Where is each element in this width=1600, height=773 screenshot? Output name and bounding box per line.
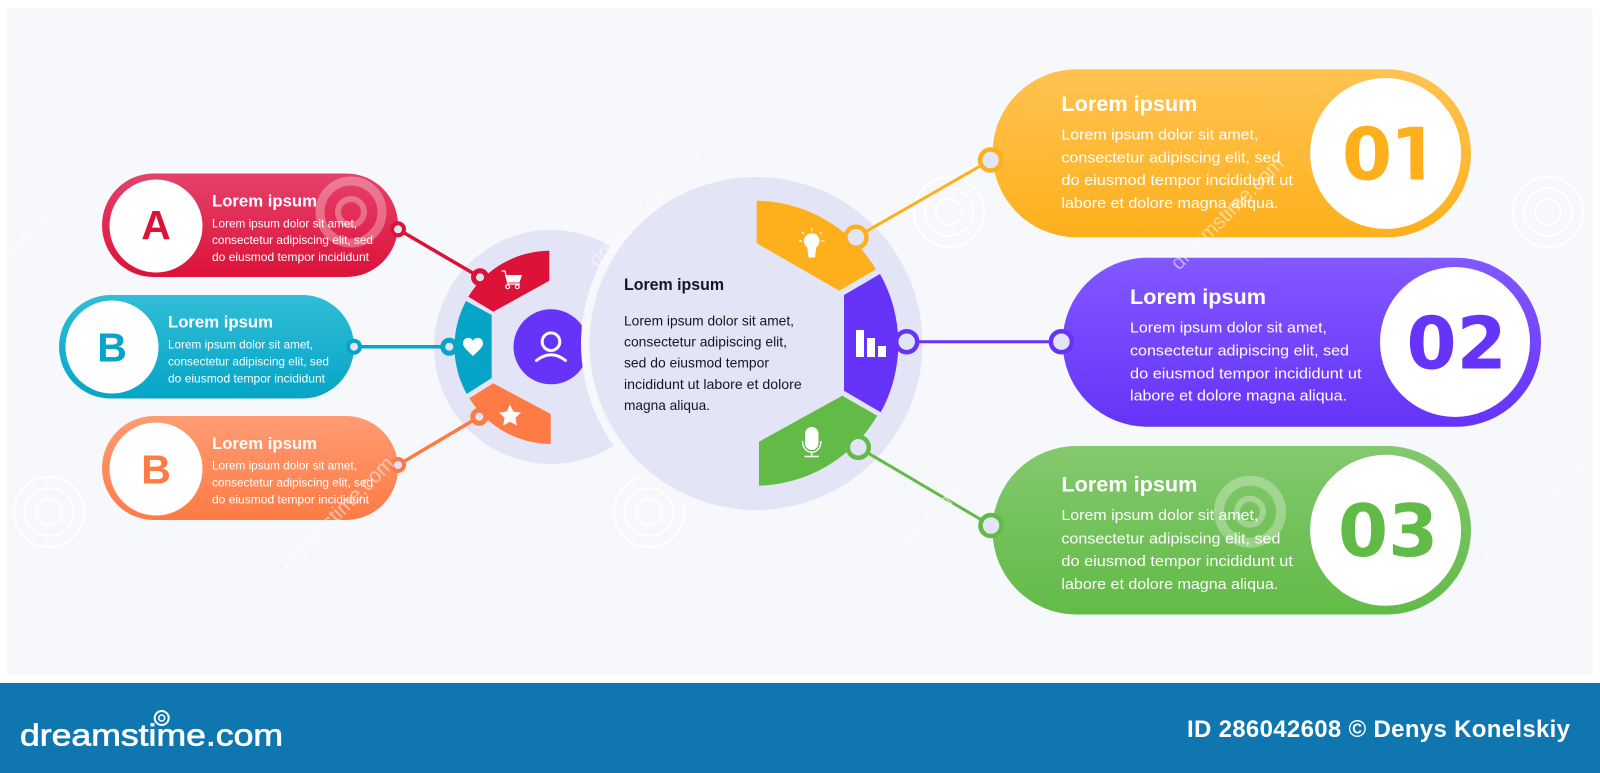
center body text: incididunt ut labore et dolore bbox=[624, 376, 802, 392]
pill A: red: do eiusmod tempor incididunt bbox=[212, 250, 370, 264]
pill 01: yellow: labore et dolore magna aliqua. bbox=[1061, 195, 1278, 212]
center body text bbox=[624, 313, 802, 413]
red segment with cart icon bbox=[468, 251, 549, 312]
pill 01: yellow: Lorem ipsum dolor sit amet, bbox=[1061, 126, 1258, 143]
center body text: sed do eiusmod tempor bbox=[624, 355, 769, 371]
yellow segment with bulb icon bbox=[757, 201, 876, 291]
pill B: orange: Lorem ipsum bbox=[212, 435, 317, 453]
pill 01: yellow: do eiusmod tempor incididunt ut bbox=[1061, 172, 1294, 189]
watermark text: dreamstime.com bbox=[276, 452, 399, 575]
watermark spirals on background bbox=[14, 177, 1583, 547]
center body text: Lorem ipsum dolor sit amet, bbox=[624, 313, 794, 329]
watermark text: dreamstime.com bbox=[878, 446, 1001, 569]
pill 01: yellow bbox=[992, 69, 1471, 237]
green segment with mic icon bbox=[759, 396, 877, 486]
pill 02: purple: consectetur adipiscing elit, sed bbox=[1130, 342, 1349, 359]
pill 03: green: Lorem ipsum dolor sit amet, bbox=[1061, 507, 1258, 524]
pill B: orange bbox=[102, 416, 398, 520]
pill 03: green: Lorem ipsum bbox=[1061, 474, 1197, 497]
small lavender circle bbox=[434, 230, 668, 464]
pill B: teal: B bbox=[97, 325, 127, 371]
pill B: orange: consectetur adipiscing elit, sed bbox=[212, 476, 373, 490]
footer bar bbox=[0, 683, 1600, 773]
user badge with icon bbox=[514, 309, 588, 384]
watermark text bbox=[0, 146, 1599, 575]
pill B: orange: Lorem ipsum dolor sit amet, bbox=[212, 458, 357, 472]
purple segment with bars icon bbox=[844, 274, 898, 412]
connector: yellow bbox=[846, 150, 1001, 248]
watermark text: dreamstime.com bbox=[1166, 152, 1289, 275]
watermark spirals over pills bbox=[320, 181, 1281, 543]
pill B: teal: Lorem ipsum dolor sit amet, bbox=[168, 337, 313, 351]
pill 02: purple: do eiusmod tempor incididunt ut bbox=[1130, 365, 1362, 382]
orange segment with star icon bbox=[469, 383, 551, 444]
center text block bbox=[624, 275, 802, 413]
pill B: teal bbox=[59, 295, 354, 398]
pill B: orange: do eiusmod tempor incididunt bbox=[212, 492, 370, 506]
center body text: consectetur adipiscing elit, bbox=[624, 334, 787, 350]
pill B: orange: B bbox=[141, 446, 171, 492]
pill A: red: Lorem ipsum bbox=[212, 193, 317, 211]
center circle separator ring bbox=[581, 168, 931, 518]
left small circle group bbox=[434, 230, 668, 464]
pill 03: green: 03 bbox=[1338, 489, 1438, 573]
center lavender circle bbox=[590, 177, 922, 510]
footer logo: dreamstime.com bbox=[20, 718, 283, 753]
pill 01: yellow: 1 bbox=[1390, 112, 1440, 196]
pill 01: yellow: consectetur adipiscing elit, sed bbox=[1061, 150, 1280, 167]
center body text: magna aliqua. bbox=[624, 397, 710, 413]
watermark text: dreamstime.com bbox=[584, 149, 707, 272]
footer credit: ID 286042608 © Denys Konelskiy bbox=[1187, 716, 1571, 743]
connector: green bbox=[848, 437, 1002, 536]
pill B: teal: consectetur adipiscing elit, sed bbox=[168, 355, 329, 369]
pill A: red: A bbox=[141, 202, 171, 248]
pill B: teal: do eiusmod tempor incididunt bbox=[168, 371, 326, 385]
pill 03: green: consectetur adipiscing elit, sed bbox=[1061, 530, 1280, 547]
pill 02: purple: Lorem ipsum dolor sit amet, bbox=[1130, 320, 1327, 337]
pill 03: green: labore et dolore magna aliqua. bbox=[1061, 576, 1278, 593]
pill 03: green bbox=[992, 446, 1471, 614]
watermark text: dreamstime.com bbox=[1476, 446, 1599, 569]
connector: purple bbox=[896, 331, 1072, 352]
pill A: red: consectetur adipiscing elit, sed bbox=[212, 233, 373, 247]
pill 02: purple: 02 bbox=[1406, 301, 1507, 385]
pill 01: yellow: Lorem ipsum bbox=[1061, 93, 1197, 116]
pill A: red bbox=[102, 174, 398, 277]
pill 02: purple: labore et dolore magna aliqua. bbox=[1130, 388, 1347, 405]
pill 01: yellow: 0 bbox=[1342, 112, 1392, 196]
teal segment with heart icon bbox=[454, 301, 492, 394]
connector: teal bbox=[348, 340, 456, 353]
pill B: teal: Lorem ipsum bbox=[168, 314, 273, 332]
connector: orange bbox=[392, 410, 486, 471]
center heading: Lorem ipsum bbox=[624, 275, 724, 294]
pill 02: purple bbox=[1063, 258, 1541, 427]
connector: red bbox=[392, 223, 486, 284]
pill A: red: Lorem ipsum dolor sit amet, bbox=[212, 216, 357, 230]
pill 02: purple: Lorem ipsum bbox=[1130, 286, 1266, 309]
pill 03: green: do eiusmod tempor incididunt ut bbox=[1061, 553, 1294, 570]
